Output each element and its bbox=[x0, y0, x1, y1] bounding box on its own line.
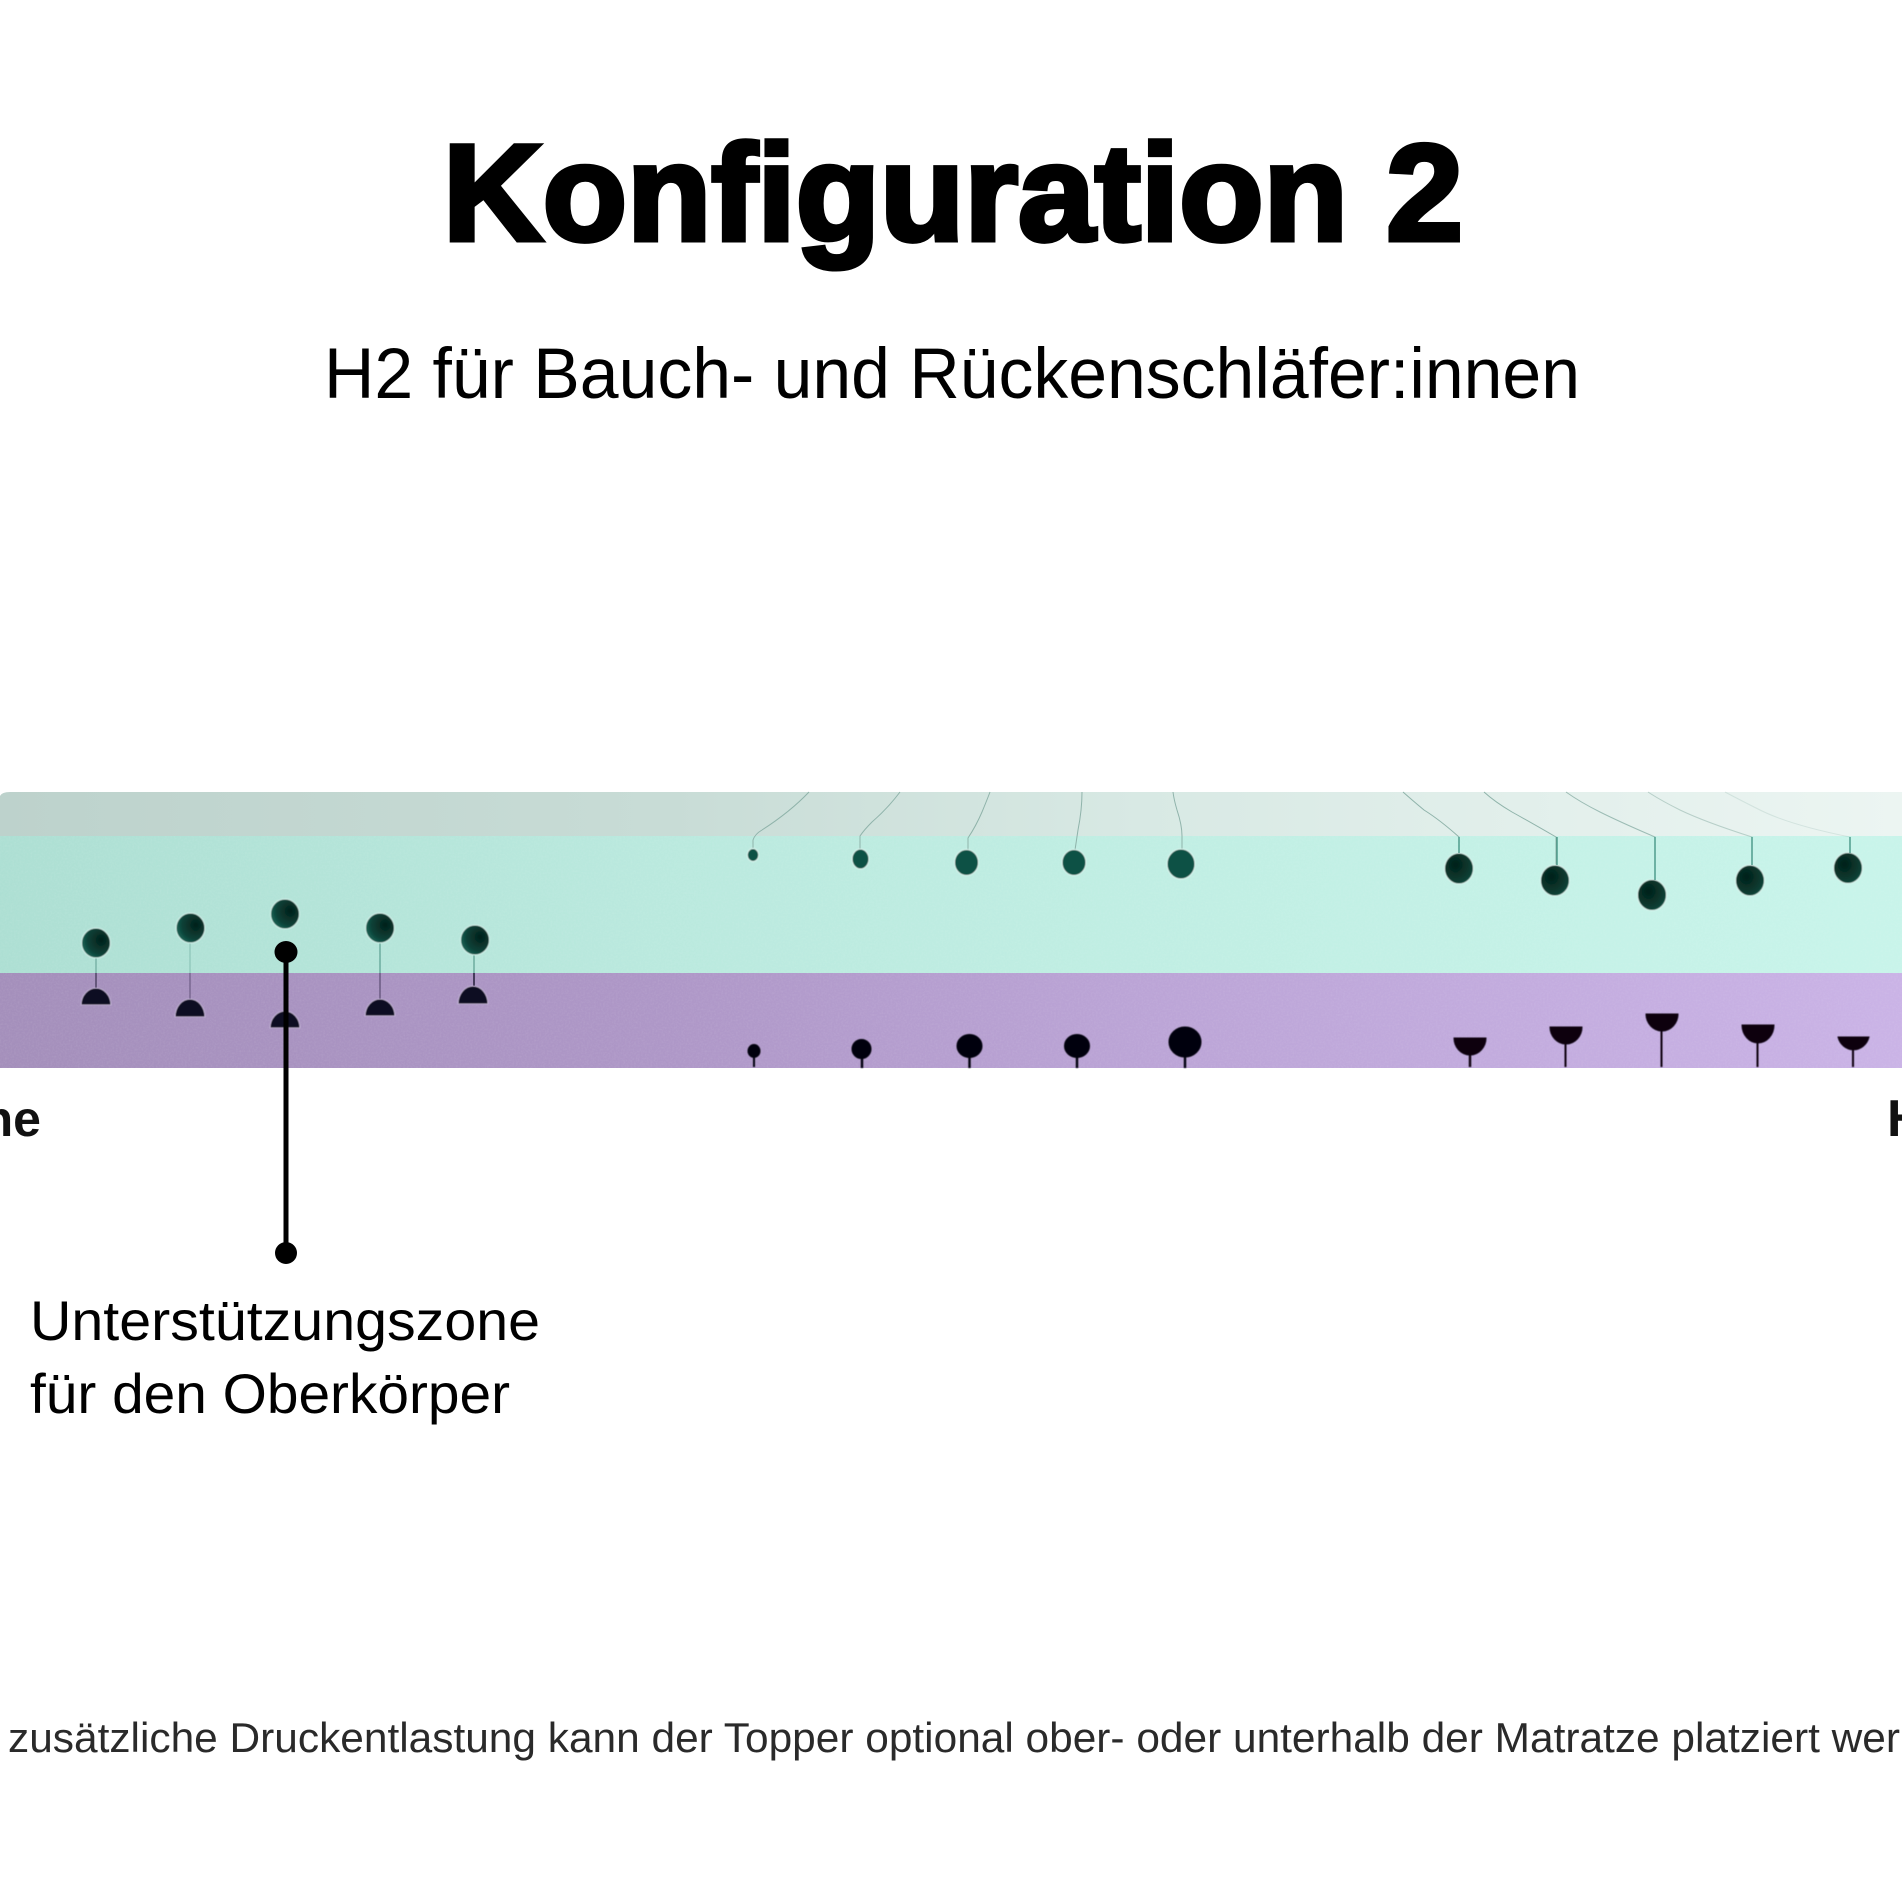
purple foam layer bbox=[0, 973, 1902, 1068]
title: Konfiguration 2 bbox=[443, 117, 1463, 270]
callout text: für den Oberkörper bbox=[30, 1362, 510, 1425]
mattress cross-section bbox=[0, 792, 1902, 1068]
subtitle: H2 für Bauch- und Rückenschläfer:innen bbox=[324, 335, 1580, 414]
holes in purple layer with stems bbox=[748, 1027, 1201, 1068]
hip-zone holes in mint layer bbox=[747, 848, 1862, 910]
mattress top face bbox=[0, 792, 1902, 837]
footnote: zusätzliche Druckentlastung kann der Topper optional ober- oder unterhalb der Matratze platziert wer bbox=[8, 1714, 1900, 1761]
callout pointer line with end dots bbox=[274, 941, 298, 1264]
callout text: Unterstützungszone bbox=[30, 1289, 540, 1352]
callout text bbox=[30, 1289, 540, 1425]
stems of right mint holes bbox=[1459, 837, 1850, 880]
mint foam layer bbox=[0, 836, 1902, 974]
half-cup holes in purple layer with stems bbox=[1454, 1014, 1869, 1067]
upper-body support zone: holes, stems and domes bbox=[81, 899, 490, 1028]
hip-zone cut lines on top face bbox=[753, 792, 1850, 880]
